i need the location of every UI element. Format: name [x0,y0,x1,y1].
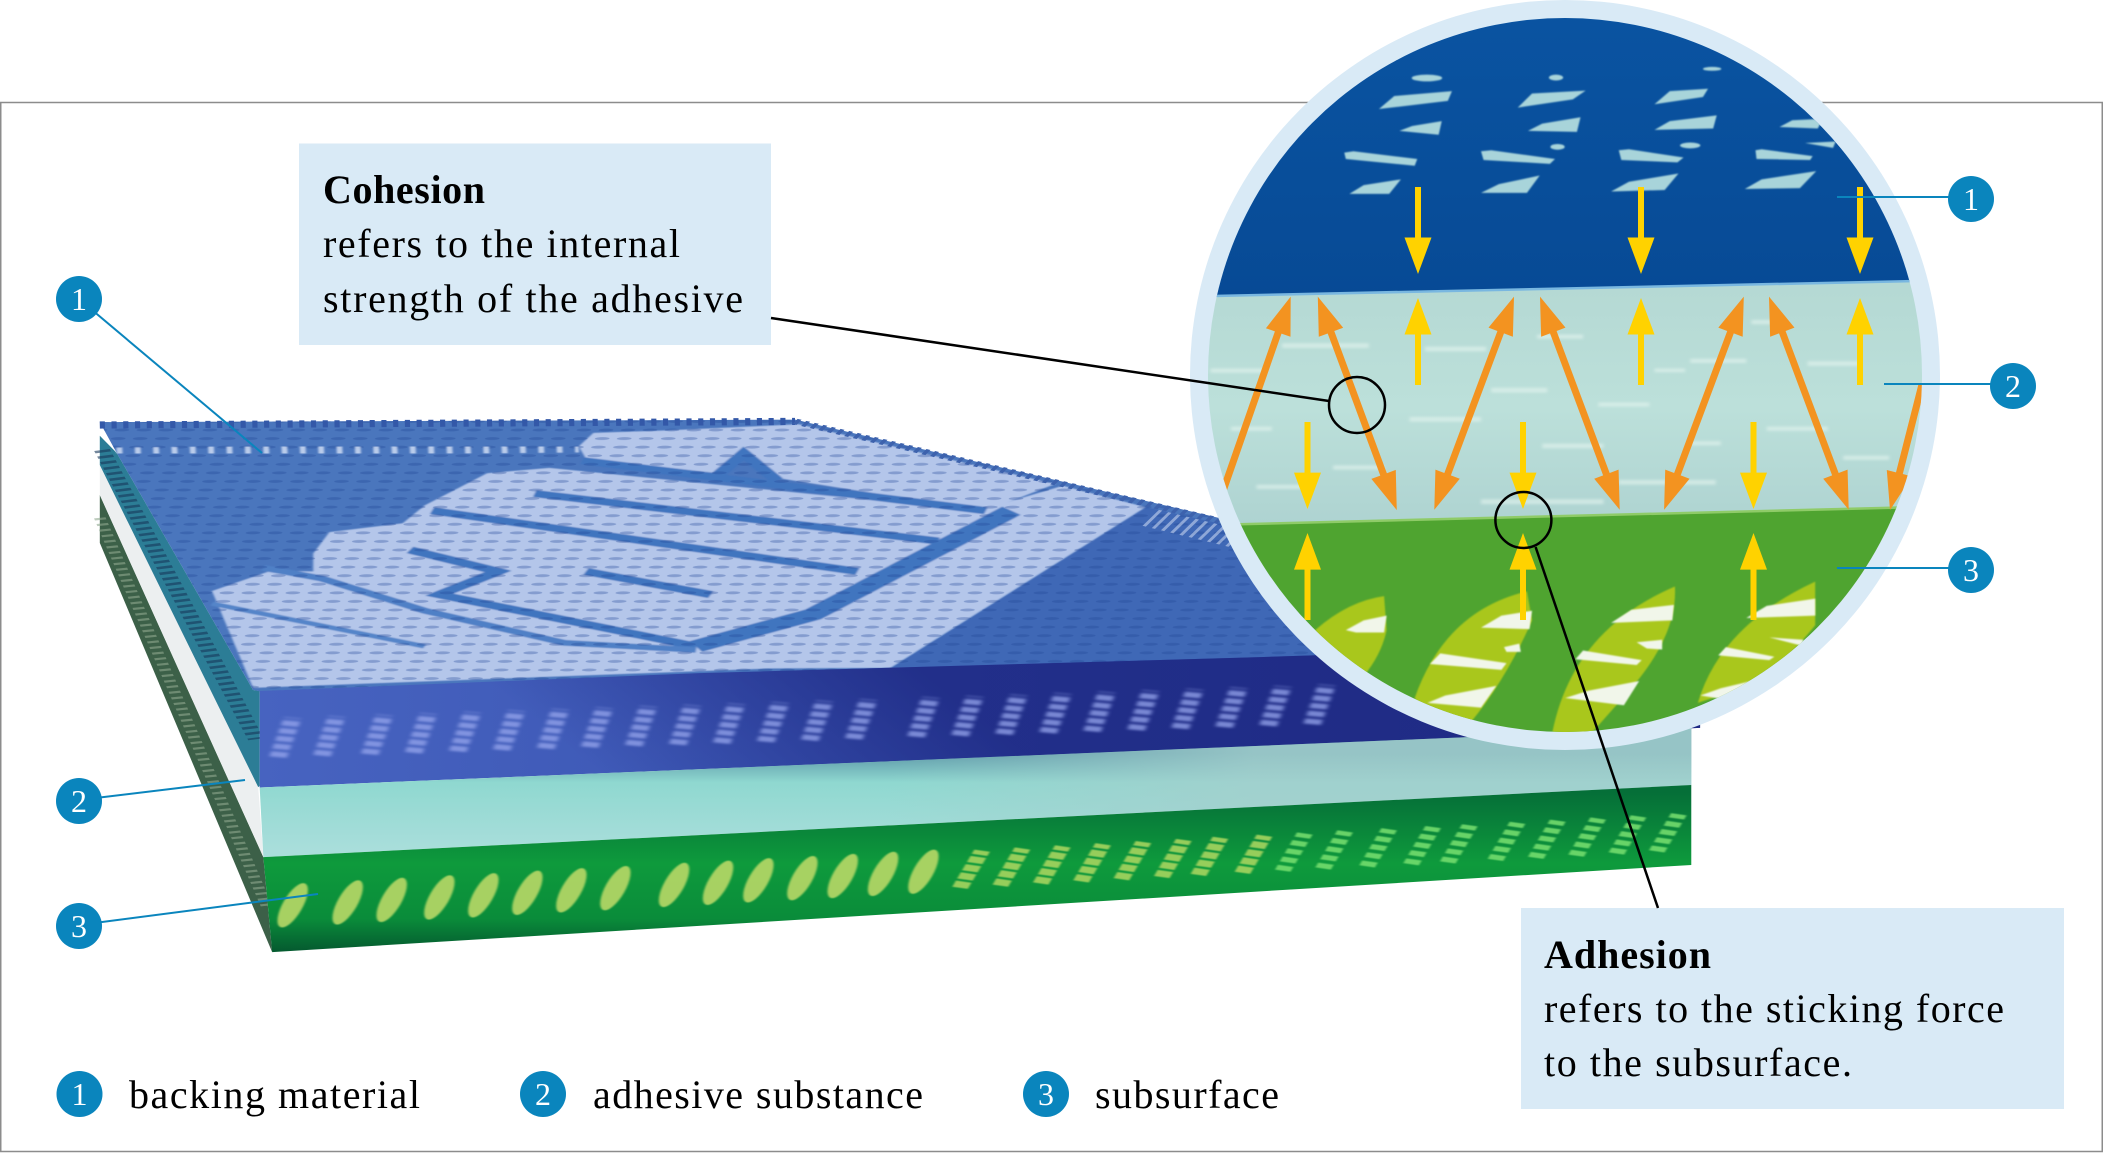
lens subsurface layer [1240,508,1896,732]
front face: backing layer [260,643,1700,787]
badge 1 right [1948,176,1994,222]
lens backing layer [1216,18,1910,296]
callout: cohesion [299,144,771,345]
orange arrow F [1769,296,1849,510]
legend item 2: 2 [535,1076,551,1112]
logo area [579,424,1055,511]
orange arrow C [1434,296,1514,510]
backing fibres [1344,67,1836,194]
legend item 3: subsurface [1095,1072,1279,1117]
3D adhesive tape slab [100,420,1789,952]
orange arrow D [1540,296,1620,510]
front face: subsurface layer [263,785,1691,952]
legend item 2: adhesive substance [593,1072,923,1117]
lens interior layers [1190,0,1940,750]
side edge: adhesive [100,465,263,857]
subsurface white fibres [1346,599,1815,708]
badge 2 left [56,778,102,824]
badge 2 right [1990,363,2036,409]
badge 3 right [1948,547,1994,593]
orange arrow A [1224,296,1291,490]
badge 1 left: 1 [71,281,87,317]
cohesion heading: Cohesion [323,167,485,212]
badge 3 left: 3 [71,908,87,944]
badge 1 right: 1 [1963,181,1979,217]
cohesion pointer line and ring [771,318,1385,433]
badge 3 right: 3 [1963,552,1979,588]
leader line 1 right [1837,196,1972,198]
yellow arrows up in subsurface [1294,533,1767,620]
yellow adhesion arrows [1294,187,1874,620]
badge 2 left: 2 [71,783,87,819]
leader line 3 right [1837,567,1972,569]
yellow arrows up in adhesive [1404,298,1874,385]
side edge: subsurface [100,495,272,952]
subsurface leaves [1315,582,1815,737]
adhesion heading: Adhesion [1544,932,1711,977]
adhesion line 1: refers to the sticking force [1544,986,2004,1031]
front face: adhesive layer [260,728,1691,857]
legend [56,1071,1279,1117]
callout: adhesion [1521,908,2064,1109]
side edge: backing [100,436,260,787]
adhesive streaks [1211,320,1889,504]
leader line 3 to subsurface [79,894,318,925]
layer boundary highlights [1190,280,1940,296]
adhesion line 2: to the subsurface. [1544,1040,1852,1085]
lens adhesive layer [1190,281,1940,526]
speckle and fibre details [1211,67,1889,737]
orange cohesion arrows [1211,292,1935,515]
yellow arrows down in backing [1404,187,1874,274]
badge 1 left [56,276,102,322]
lens ring [1190,0,1940,750]
adhesion pointer line and ring [1495,492,1658,908]
cohesion line 1: refers to the internal [323,221,680,266]
orange arrow E [1664,296,1744,510]
orange arrow G [1886,385,1922,510]
adhesive boundary highlight [1240,506,1897,526]
top face of backing material [100,420,1789,691]
badge 2 right: 2 [2005,368,2021,404]
leader line 2 to adhesive [79,780,245,800]
yellow arrows down in adhesive [1294,422,1767,509]
orange arrow B [1318,296,1397,510]
leader line 1 to backing material [79,299,262,453]
leader line 2 right [1884,383,2013,385]
cohesion line 2: strength of the adhesive [323,276,743,321]
legend item 1: backing material [129,1072,420,1117]
magnifier lens [1190,0,1940,750]
legend item 3: 3 [1038,1076,1054,1112]
badge 3 left [56,903,102,949]
legend item 1: 1 [72,1076,88,1112]
